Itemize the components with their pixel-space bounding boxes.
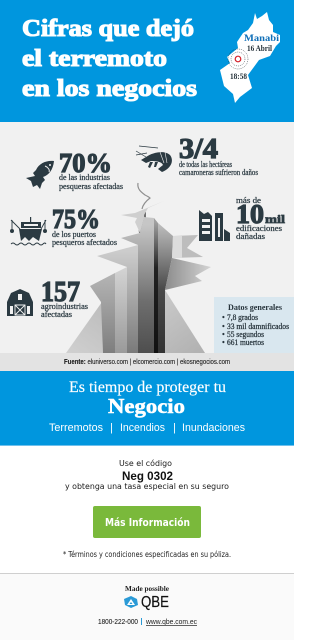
title: en los negocios (22, 76, 197, 102)
panel: datos generales: 7,8 grados (227, 313, 258, 322)
stat: agro-industries: agroindustrias (41, 302, 88, 311)
illustration: ground crack (66, 183, 211, 353)
panel: protect your business (0, 371, 294, 446)
panel: protect your business: Incendios (120, 422, 165, 434)
icon: epicentre (228, 49, 248, 69)
panel: datos generales: • (222, 313, 225, 322)
terms note: * Términos y condiciones especificadas en su póliza. (63, 550, 231, 559)
panel: promo code: Neg 0302 (122, 469, 173, 483)
footer (0, 573, 294, 640)
stat: fish industries: 70% (59, 148, 112, 178)
panel: datos generales: 33 mil damnificados (227, 322, 289, 331)
panel: datos generales: Datos generales (228, 303, 282, 312)
stat: fish industries (26, 148, 123, 191)
stat: damaged buildings: edificaciones (236, 224, 282, 233)
source bar: Fuente: eluniverso.com | elcomercio.com | ekosnegocios.com (64, 359, 230, 366)
stat: fishing ports (10, 204, 117, 247)
icon: fish (26, 161, 54, 189)
stat: shrimp farms: 3/4 (179, 134, 218, 165)
map: Manabí (220, 12, 280, 103)
panel: header (0, 0, 294, 122)
panel: datos generales: • (222, 330, 225, 339)
panel: protect your business: Inundaciones (182, 422, 245, 434)
stat: shrimp farms (136, 134, 258, 177)
stat: fishing ports: pesqueros afectados (52, 238, 117, 247)
icon: buildings (199, 210, 230, 241)
icon: barn (7, 289, 33, 316)
panel: stats background (0, 122, 294, 353)
logo: QBE: QBE (141, 594, 169, 611)
panel: protect your business: | (110, 422, 113, 434)
map: Manabí: 18:58 (230, 72, 247, 81)
button: más información (93, 506, 201, 538)
panel: datos generales: 55 segundos (227, 330, 264, 339)
logo: QBE (124, 594, 169, 611)
panel: promo code: Use el código (119, 458, 172, 468)
panel: datos generales: 661 muertos (227, 338, 264, 347)
panel: protect your business: Terremotos (49, 422, 103, 434)
stat: fishing ports: 75% (52, 204, 100, 234)
stat: damaged buildings: más de (236, 196, 262, 205)
icon: shrimp (136, 146, 172, 172)
title (22, 16, 197, 102)
footer: Made possible (125, 585, 169, 593)
title: Cifras que dejó (22, 16, 194, 42)
panel: datos generales (214, 297, 294, 353)
stat: agro-industries (7, 277, 88, 319)
footer: 1800-222-000 (98, 619, 138, 626)
stat: fish industries: de las industrias (59, 173, 110, 182)
footer: www.qbe.com.ec (145, 619, 197, 626)
source bar (0, 353, 294, 371)
stat: shrimp farms: de todas las hectáreas (179, 160, 232, 169)
stat: fishing ports: de los puertos (52, 230, 96, 239)
panel: protect your business: | (173, 422, 176, 434)
panel: datos generales: • (222, 322, 225, 331)
stat: damaged buildings: mil (265, 212, 286, 226)
panel: protect your business: Negocio (108, 394, 185, 418)
panel: protect your business: Es tiempo de proteger tu (69, 379, 226, 396)
stat: agro-industries: afectadas (41, 310, 72, 319)
stat: shrimp farms: camaroneras sufrieron daños (179, 168, 258, 177)
panel: datos generales: • (222, 338, 225, 347)
map: Manabí: Manabi (244, 34, 279, 44)
map: Manabí: 16 Abril (247, 44, 273, 53)
stat: damaged buildings (199, 196, 286, 241)
stat: damaged buildings: 10 (236, 199, 264, 229)
icon: fishing boat (10, 217, 47, 245)
panel: promo code: y obtenga una tasa especial en su seguro (65, 482, 229, 491)
stat: agro-industries: 157 (41, 277, 80, 308)
panel: promo code (0, 446, 294, 573)
button: más información: Más Información (105, 517, 190, 529)
title: el terremoto (22, 46, 167, 72)
stat: fish industries: pesqueras afectadas (59, 182, 123, 191)
stat: damaged buildings: dañadas (236, 232, 265, 241)
